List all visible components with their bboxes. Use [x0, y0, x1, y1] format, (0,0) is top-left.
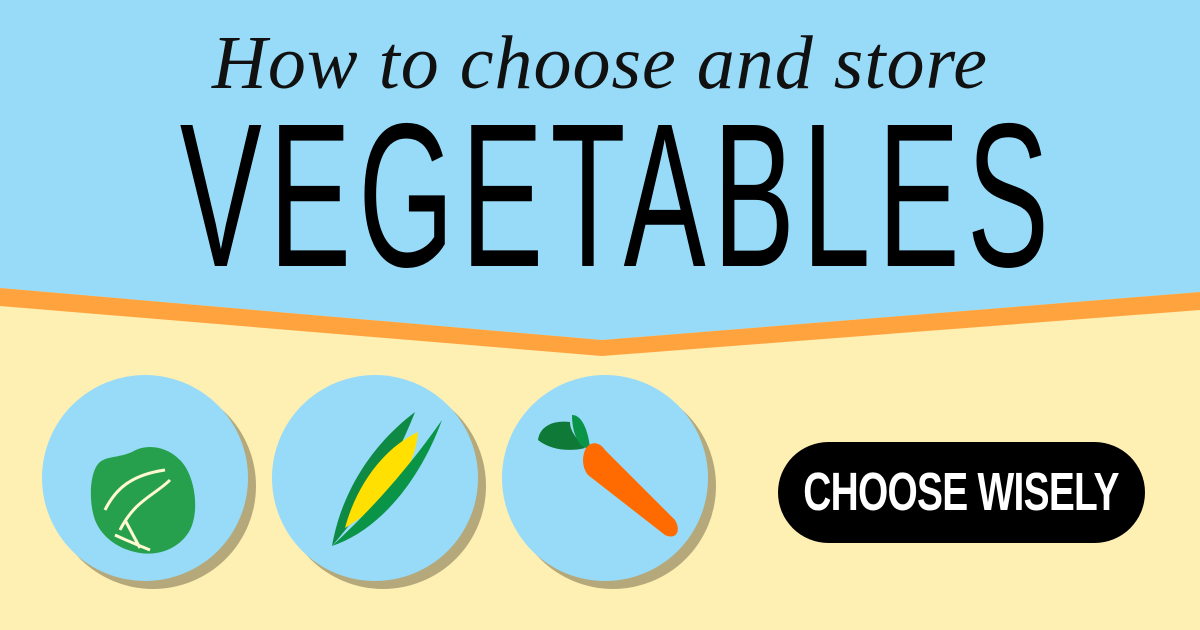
title main word: VEGETABLES — [180, 81, 1056, 310]
icon: cabbage — [42, 375, 256, 589]
button: choose wisely — [778, 442, 1145, 543]
button: choose wisely: CHOOSE WISELY — [803, 462, 1119, 522]
icon: carrot — [502, 375, 716, 589]
title script line: How to choose and store — [212, 21, 988, 105]
icon: corn — [272, 375, 486, 589]
